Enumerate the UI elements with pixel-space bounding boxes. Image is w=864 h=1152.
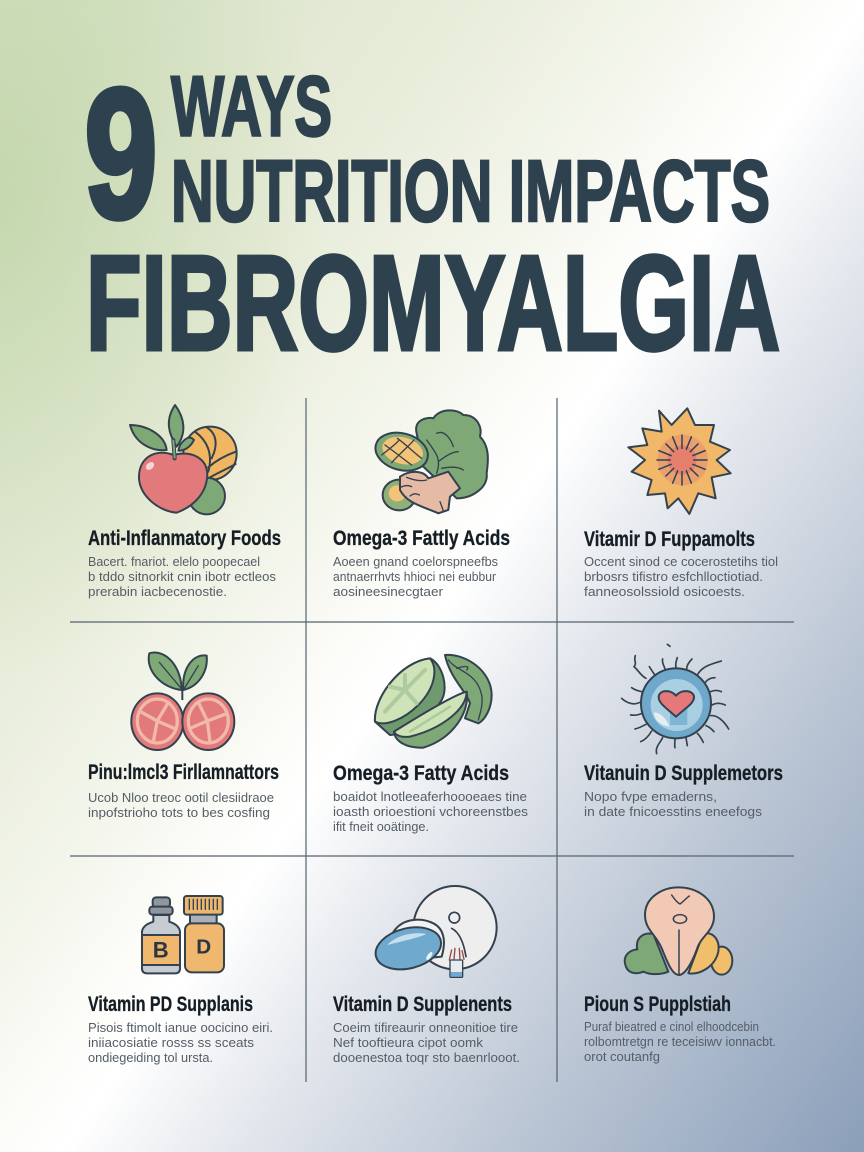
description: Coeim tifireaurir onneonitioe tire <box>333 1021 518 1035</box>
heading: Omega-3 Fattly Acids <box>333 527 510 550</box>
panel: vitamin d supplements (middle) <box>584 644 783 819</box>
description: aosineesinecgtaer <box>333 585 443 599</box>
description <box>88 555 276 599</box>
description: brbosrs tifistro esfchlloctiotiad. <box>584 570 763 584</box>
icon: vitamin bottles B and D <box>142 896 224 973</box>
panel: vitamin d supplements (bottom) <box>333 886 520 1065</box>
description: ioasth orioestioni vchoreenstbes <box>333 805 528 819</box>
panel: vitamin pd supplements <box>88 896 273 1065</box>
icon: capsule and round tablet <box>371 886 497 977</box>
icon: greens with mango and hand <box>371 410 488 513</box>
panel: omega-3 fatty acids (top) <box>333 410 510 599</box>
description: ondiegeiding tol ursta. <box>88 1051 213 1065</box>
heading: Anti-Inflanmatory Foods <box>88 527 281 550</box>
heading: Pinu:lmcl3 Firllamnattors <box>88 761 279 784</box>
title numeral 9: 9 <box>84 50 158 256</box>
panel: vitamin d (top) <box>584 408 778 599</box>
description: prerabin iacbecenostie. <box>88 585 227 599</box>
icon: vitamin bottles B and D: D <box>196 935 211 958</box>
panel: fruit halves <box>88 653 279 820</box>
description <box>88 791 274 820</box>
description <box>584 555 778 599</box>
icon: guava halves with leaves <box>131 653 234 750</box>
title <box>84 50 780 378</box>
description <box>584 790 762 819</box>
description: iniiacosiatie rosss ss sceats <box>88 1036 254 1050</box>
description: ifit fneit ooätinge. <box>333 820 429 834</box>
icon: lime slices <box>375 655 492 748</box>
description: Aoeen gnand coelorspneefbs <box>333 555 498 569</box>
description <box>88 1021 273 1065</box>
description: fanneosolssiold osicoests. <box>584 585 745 599</box>
description: orot coutanfg <box>584 1050 660 1064</box>
panel: pioun s pupplstah <box>584 887 776 1064</box>
icon: sun burst <box>628 408 731 514</box>
description: rolbomtretgn re teceisiwv ionnacbt. <box>584 1035 776 1049</box>
description: Pisois ftimolt ianue oocicino eiri. <box>88 1021 273 1035</box>
heading: Omega-3 Fatty Acids <box>333 762 509 785</box>
description <box>584 1020 776 1064</box>
description <box>333 555 498 599</box>
heading: Pioun S Pupplstiah <box>584 993 731 1016</box>
description: Puraf bieatred e cinol elhoodcebin <box>584 1020 759 1034</box>
heading: Vitamir D Fuppamolts <box>584 528 755 551</box>
description <box>333 790 528 834</box>
description: Nopo fvpe emaderns, <box>584 790 717 804</box>
heading: Vitamin D Supplenents <box>333 993 512 1016</box>
description: Ucob Nloo treoc ootil clesiidraoe <box>88 791 274 805</box>
description: b tddo sitnorkit cnin ibotr ectleos <box>88 570 276 584</box>
heading: Vitamin PD Supplanis <box>88 993 253 1016</box>
description <box>333 1021 520 1065</box>
description: inpofstrioho tots to bes cosfing <box>88 806 270 820</box>
icon: apple with citrus <box>130 405 237 514</box>
icon: vitamin bottles B and D: B <box>153 937 169 962</box>
description: Bacert. fnariot. elelo poopecael <box>88 555 260 569</box>
description: in date fnicoesstins eneefogs <box>584 805 762 819</box>
description: Nef tooftieura cipot oomk <box>333 1036 484 1050</box>
panel: omega-3 fatty acids (middle) <box>333 655 528 834</box>
heading: Vitanuin D Supplemetors <box>584 762 783 785</box>
title line: WAYS: WAYS <box>171 60 332 154</box>
icon: cell with heart <box>622 644 729 754</box>
description: Occent sinod ce cocerostetihs tiol <box>584 555 778 569</box>
description: dooenestoa toqr sto baenrlooot. <box>333 1051 520 1065</box>
panel: anti-inflammatory foods <box>88 405 281 599</box>
icon: tooth shape with produce <box>625 887 732 975</box>
description: boaidot lnotleeaferhoooeaes tine <box>333 790 527 804</box>
description: antnaerrhvts hhioci nei eubbur <box>333 570 496 584</box>
